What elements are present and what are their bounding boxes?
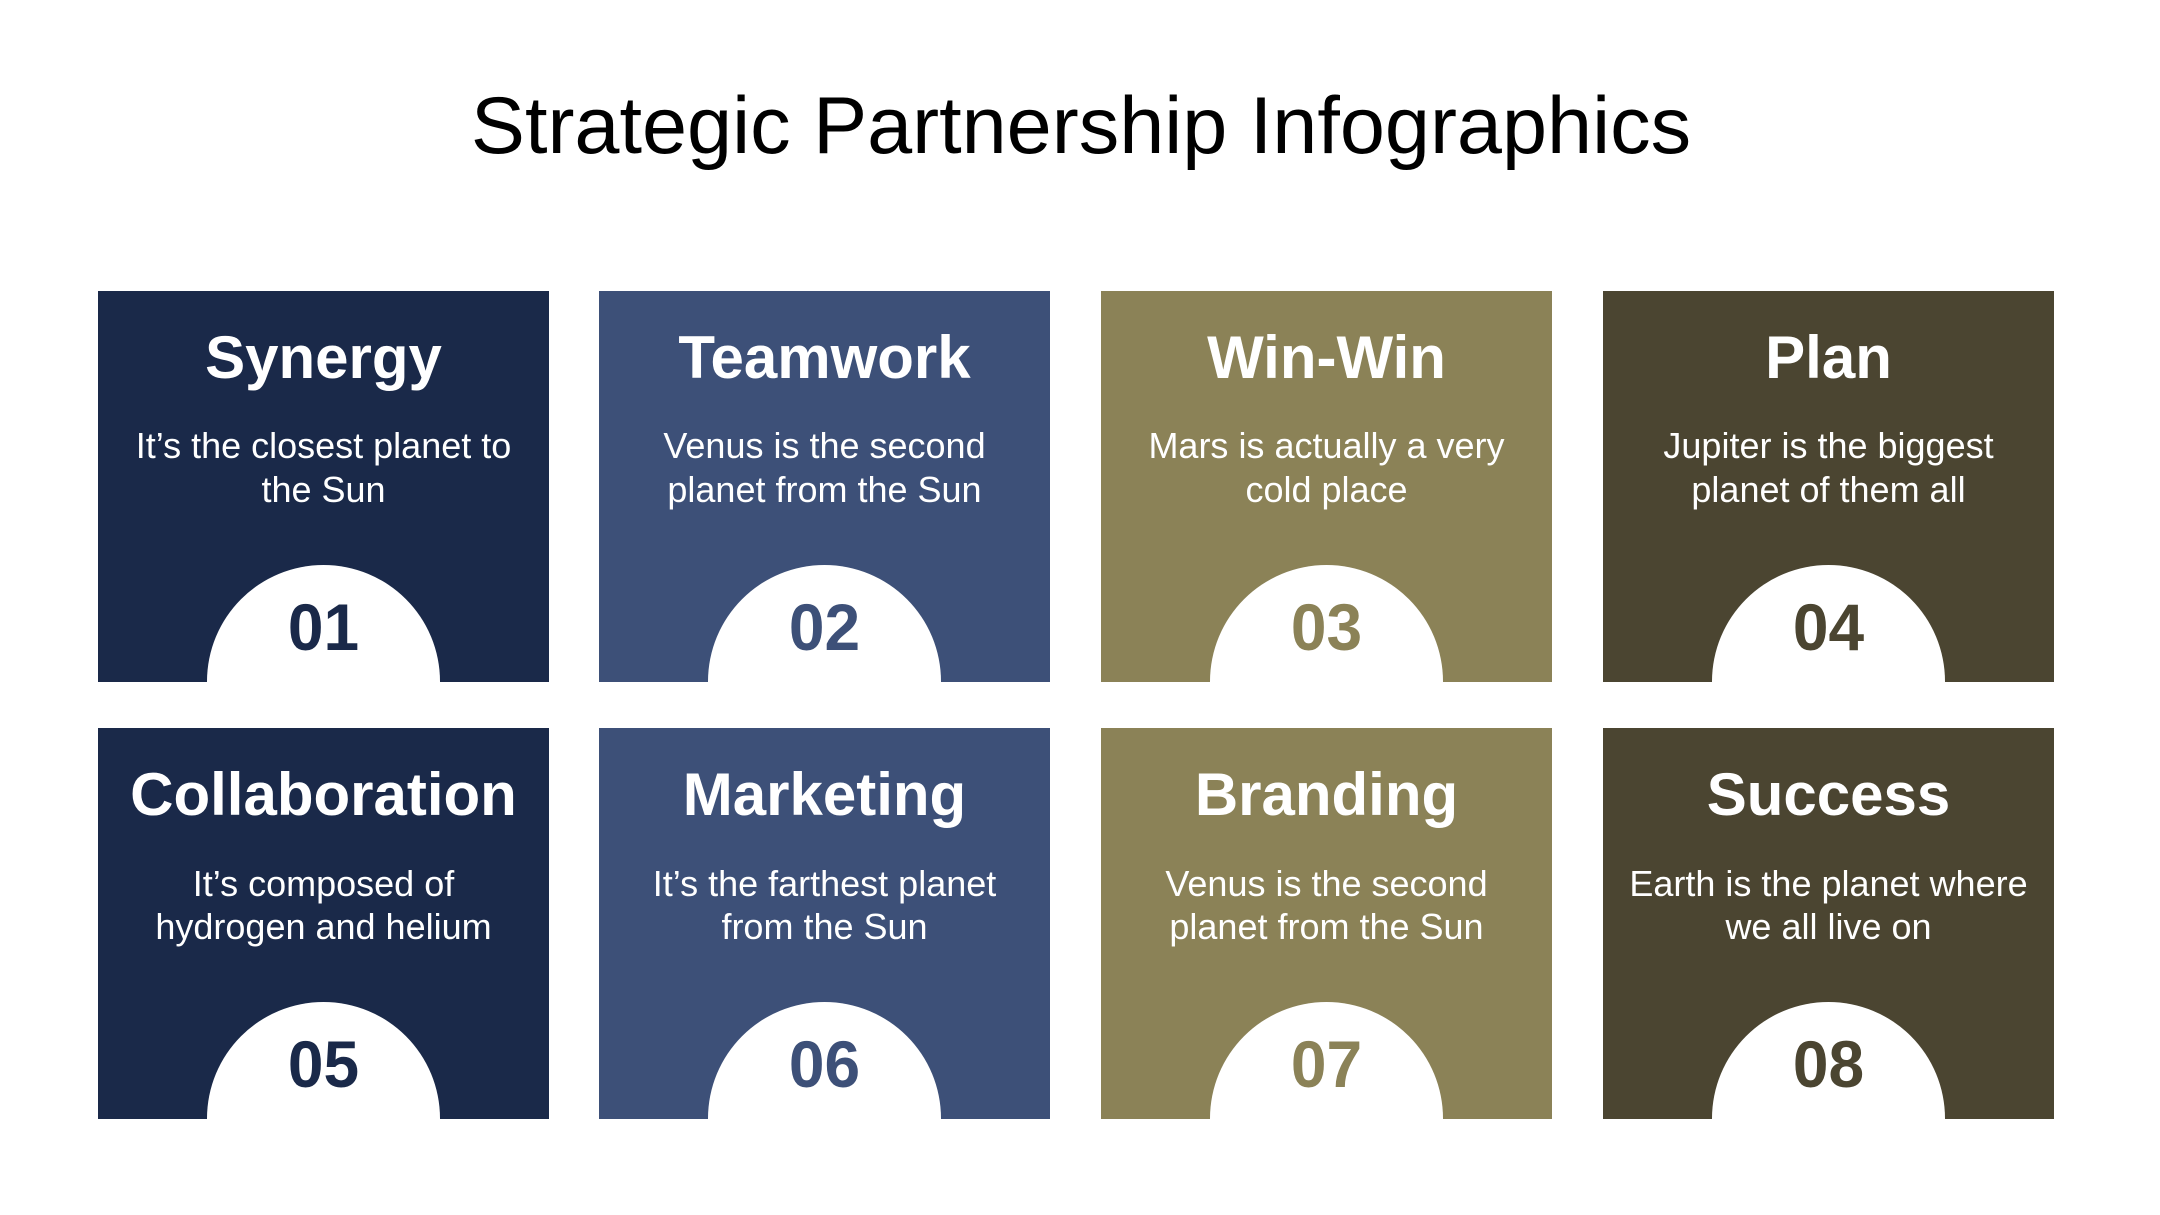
text: Marketing description bbox=[653, 863, 996, 947]
heading: Branding: Branding bbox=[1195, 761, 1458, 828]
number badge 02 bbox=[708, 565, 941, 682]
number badge 02: 02 bbox=[789, 590, 860, 664]
heading: Marketing: Marketing bbox=[683, 761, 966, 828]
text: Collaboration description bbox=[155, 863, 492, 947]
number badge 04 bbox=[1712, 565, 1945, 682]
number badge 05: 05 bbox=[288, 1027, 359, 1101]
text: Branding description: planet from the Sun bbox=[1169, 906, 1484, 947]
text: Collaboration description: hydrogen and helium bbox=[155, 906, 492, 947]
number badge 01: 01 bbox=[288, 590, 359, 664]
number badge 06: 06 bbox=[789, 1027, 860, 1101]
number badge 08 bbox=[1712, 1002, 1945, 1119]
panel: Plan bbox=[1603, 291, 2054, 682]
text: Branding description: Venus is the second bbox=[1165, 863, 1488, 904]
panel: Success bbox=[1603, 728, 2054, 1119]
text: Collaboration description: It’s composed of bbox=[193, 863, 454, 904]
panel: Collaboration bbox=[98, 728, 549, 1119]
number badge 07: 07 bbox=[1291, 1027, 1362, 1101]
text: Success description bbox=[1629, 863, 2028, 947]
panel: Teamwork bbox=[599, 291, 1050, 682]
text: Synergy description bbox=[136, 425, 511, 510]
text: Win-Win description bbox=[1148, 425, 1505, 510]
number badge 04: 04 bbox=[1793, 590, 1864, 664]
number badge 03: 03 bbox=[1291, 590, 1362, 664]
number badge 06 bbox=[708, 1002, 941, 1119]
heading: Synergy: Synergy bbox=[205, 324, 442, 391]
text: Teamwork description bbox=[663, 425, 986, 510]
text: Win-Win description: cold place bbox=[1245, 468, 1408, 510]
text: Success description: we all live on bbox=[1725, 906, 1932, 947]
text: Teamwork description: planet from the Sun bbox=[667, 468, 982, 510]
text: Success description: Earth is the planet where bbox=[1629, 863, 2028, 904]
heading: Plan: Plan bbox=[1765, 324, 1892, 391]
text: Plan description: Jupiter is the biggest bbox=[1663, 425, 1994, 466]
heading: Win-Win: Win-Win bbox=[1207, 324, 1446, 391]
text: Branding description bbox=[1165, 863, 1488, 947]
title: Strategic Partnership Infographics bbox=[471, 81, 1691, 171]
number badge 08: 08 bbox=[1793, 1027, 1864, 1101]
panel: Synergy bbox=[98, 291, 549, 682]
panel: Win-Win bbox=[1101, 291, 1552, 682]
number badge 05 bbox=[207, 1002, 440, 1119]
heading: Teamwork: Teamwork bbox=[678, 324, 971, 391]
text: Plan description: planet of them all bbox=[1691, 468, 1966, 510]
heading: Collaboration: Collaboration bbox=[130, 761, 517, 828]
number badge 03 bbox=[1210, 565, 1443, 682]
text: Teamwork description: Venus is the second bbox=[663, 425, 986, 466]
text: Marketing description: It’s the farthest planet bbox=[653, 863, 996, 904]
text: Synergy description: It’s the closest planet to bbox=[136, 425, 511, 466]
text: Synergy description: the Sun bbox=[261, 468, 386, 510]
panel: Marketing bbox=[599, 728, 1050, 1119]
number badge 07 bbox=[1210, 1002, 1443, 1119]
number badge 01 bbox=[207, 565, 440, 682]
heading: Success: Success bbox=[1707, 761, 1950, 828]
text: Marketing description: from the Sun bbox=[721, 906, 928, 947]
text: Plan description bbox=[1663, 425, 1994, 510]
text: Win-Win description: Mars is actually a very bbox=[1148, 425, 1505, 466]
panel: Branding bbox=[1101, 728, 1552, 1119]
